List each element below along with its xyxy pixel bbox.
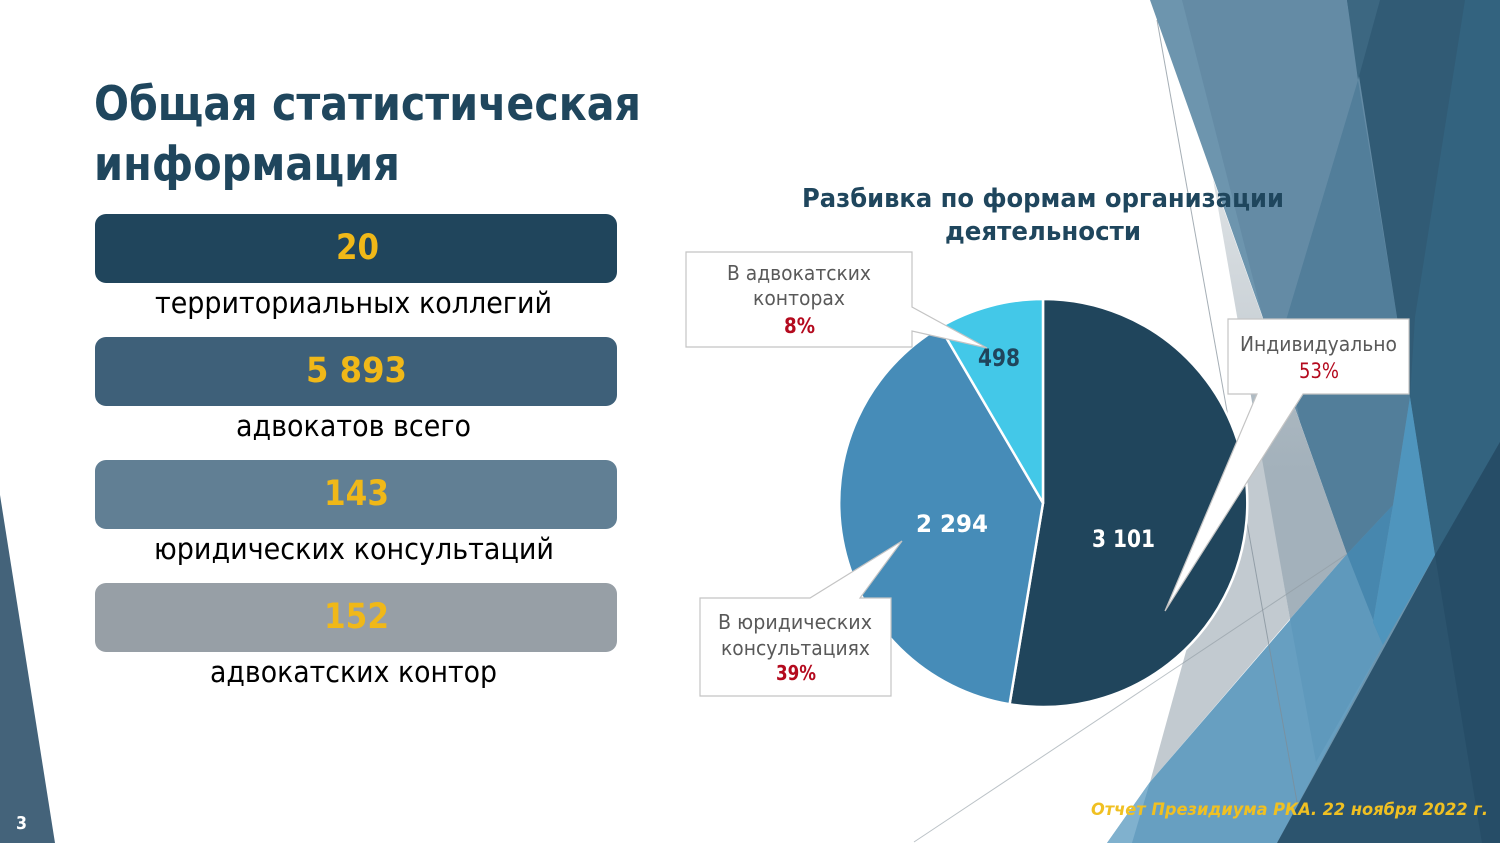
chart title bbox=[802, 184, 1284, 247]
stat: lawyers total bbox=[95, 337, 617, 443]
background: right geometric facets bbox=[914, 0, 1500, 843]
callout: individual 53%: Индивидуально bbox=[1240, 332, 1397, 356]
pie value labels bbox=[916, 344, 1155, 553]
title: Общая статистическая bbox=[94, 77, 641, 132]
pie value labels: 3 101 bbox=[1092, 525, 1155, 553]
stat: legal consultations bbox=[95, 460, 617, 566]
stat: law offices: 152 bbox=[324, 597, 389, 637]
slice: consultations 2 294 bbox=[839, 327, 1043, 704]
chart title: деятельности bbox=[945, 217, 1141, 247]
callout: law offices 8%: 8% bbox=[784, 314, 815, 338]
pie chart bbox=[839, 299, 1247, 707]
callout: law offices 8%: В адвокатских bbox=[727, 261, 871, 285]
callout: law offices 8%: конторах bbox=[753, 286, 845, 310]
stat: territorial colleges: территориальных коллегий bbox=[155, 286, 552, 320]
stat: lawyers total: адвокатов всего bbox=[236, 409, 471, 443]
chart title: Разбивка по формам организации bbox=[802, 184, 1284, 214]
title: информация bbox=[94, 137, 400, 192]
callout: legal consultations 39%: 39% bbox=[776, 661, 816, 685]
title bbox=[94, 77, 641, 192]
callout: law offices 8% bbox=[686, 252, 987, 348]
callout: legal consultations 39%: В юридических bbox=[718, 610, 872, 634]
callout: individual 53% bbox=[1165, 319, 1409, 611]
background: left corner triangle bbox=[0, 495, 55, 843]
slice: offices 498 bbox=[940, 299, 1043, 503]
stat: territorial colleges: 20 bbox=[336, 228, 379, 268]
footer source note: Отчет Президиума РКА. 22 ноября 2022 г. bbox=[1091, 800, 1488, 820]
slice: individual 3 101 bbox=[1010, 299, 1247, 707]
callout: legal consultations 39%: консультациях bbox=[721, 636, 870, 660]
stat: lawyers total: 5 893 bbox=[306, 351, 407, 391]
slide number: 3 bbox=[16, 813, 27, 834]
stat: law offices bbox=[95, 583, 617, 689]
stat: legal consultations: юридических консультаций bbox=[154, 532, 554, 566]
stat: law offices: адвокатских контор bbox=[210, 655, 497, 689]
callout: individual 53%: 53% bbox=[1299, 359, 1339, 383]
pie value labels: 498 bbox=[978, 344, 1020, 372]
pie value labels: 2 294 bbox=[916, 510, 988, 538]
stat: legal consultations: 143 bbox=[324, 474, 389, 514]
callout: legal consultations 39% bbox=[700, 541, 902, 696]
stat: territorial colleges bbox=[95, 214, 617, 320]
